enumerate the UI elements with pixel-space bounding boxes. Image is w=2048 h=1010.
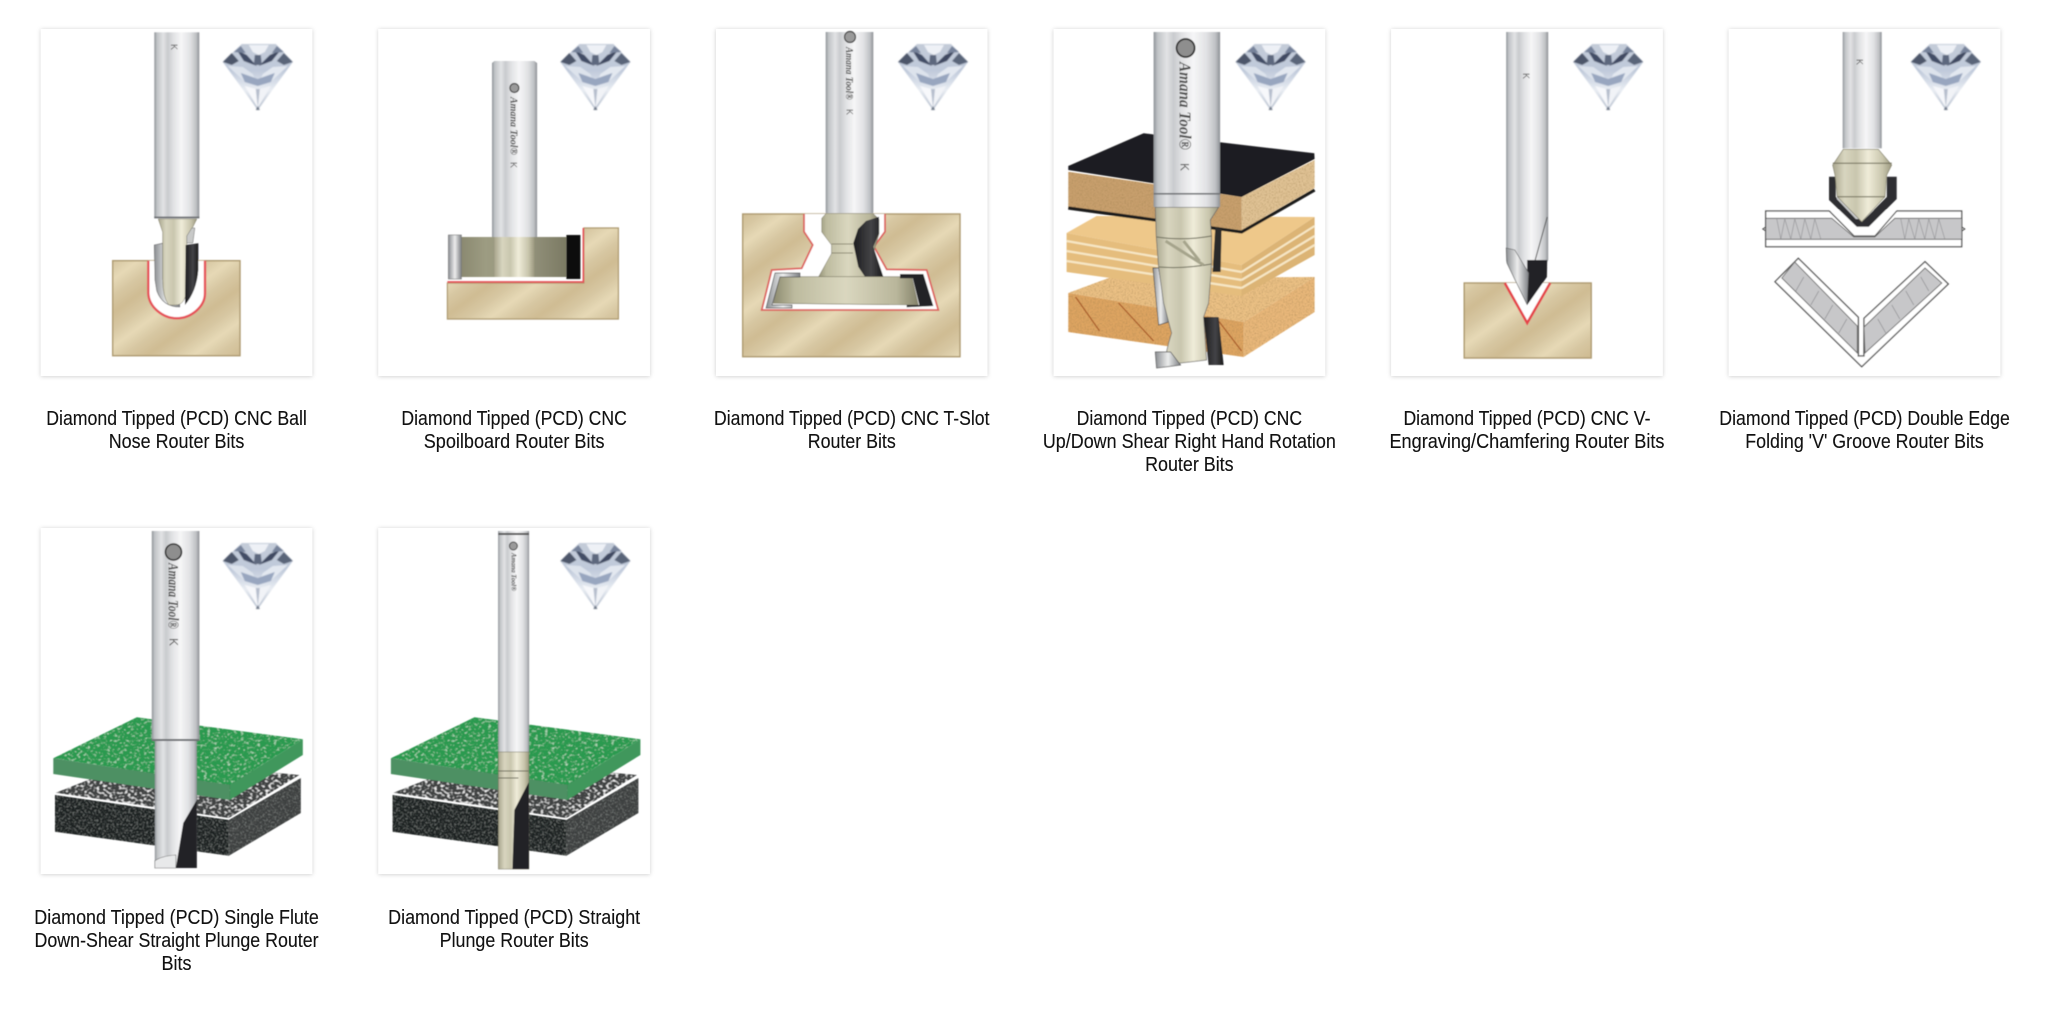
card: CNC Spoilboard Router Bits	[378, 29, 650, 453]
caption	[1389, 408, 1664, 453]
caption	[46, 408, 307, 453]
illustration: folding V-groove bit and composite panel: K	[1854, 59, 1864, 65]
illustration: ball nose bit cutting a groove in wood	[113, 32, 240, 356]
illustration: V-engraving bit in wood: K	[1521, 73, 1531, 79]
caption: Plunge Router Bits	[440, 930, 589, 952]
card background	[41, 29, 312, 376]
card: CNC V-Engraving/Chamfering Router Bits	[1389, 29, 1664, 453]
caption: Diamond Tipped (PCD) Straight	[388, 907, 641, 929]
card background	[1054, 29, 1325, 376]
caption	[401, 408, 627, 453]
caption: Diamond Tipped (PCD) Double Edge	[1719, 408, 2010, 430]
caption: Diamond Tipped (PCD) CNC T-Slot	[714, 408, 990, 430]
illustration: compression bit with layered boards: K	[1178, 163, 1192, 171]
card: CNC Ball Nose Router Bits	[41, 29, 312, 453]
caption: Diamond Tipped (PCD) CNC Ball	[46, 408, 307, 430]
illustration: single flute bit with green and black sheets: K	[166, 638, 180, 646]
card background	[1729, 29, 2000, 376]
caption	[1043, 408, 1336, 476]
caption	[388, 907, 641, 952]
green sheet	[53, 717, 303, 800]
illustration: compression bit with layered boards: Amana Tool®	[1176, 61, 1195, 150]
illustration: ball nose bit cutting a groove in wood: K	[169, 44, 179, 50]
caption: Folding 'V' Groove Router Bits	[1745, 431, 1984, 453]
card: CNC Up/Down Shear Right Hand Rotation Router Bits	[1043, 29, 1336, 476]
caption: Down-Shear Straight Plunge Router	[35, 930, 319, 952]
caption: Up/Down Shear Right Hand Rotation	[1043, 431, 1336, 453]
flat composite panel with V groove	[1763, 210, 1965, 247]
icon: diamond	[1911, 44, 1981, 110]
icon: diamond	[223, 543, 293, 609]
illustration: straight plunge bit with green and black sheets	[391, 531, 640, 869]
card background	[1391, 29, 1663, 376]
caption: Diamond Tipped (PCD) CNC V-	[1403, 408, 1650, 430]
card background	[716, 29, 988, 376]
caption	[714, 408, 990, 453]
illustration: T-slot bit in wood: Amana Tool®	[843, 46, 855, 100]
icon: diamond	[898, 44, 968, 110]
illustration: folding V-groove bit and composite panel	[1763, 32, 1965, 367]
caption: Diamond Tipped (PCD) CNC	[1077, 408, 1302, 430]
illustration: compression bit with layered boards	[1067, 32, 1315, 368]
caption: Nose Router Bits	[109, 431, 244, 453]
icon: diamond	[1236, 44, 1306, 110]
card: Single Flute Down-Shear Straight Plunge Router Bits	[34, 528, 319, 975]
illustration: single flute bit with green and black sheets	[53, 531, 303, 868]
black textured sheet	[393, 760, 638, 856]
icon: diamond	[1573, 44, 1643, 110]
illustration: spoilboard surfacing bit in wood	[447, 61, 618, 319]
card: Double Edge Folding 'V' Groove Router Bits	[1719, 29, 2010, 453]
top board: laminate on particle board	[1068, 133, 1315, 232]
middle board: plywood	[1067, 216, 1315, 296]
caption	[1719, 408, 2010, 453]
illustration: straight plunge bit with green and black sheets: Amana Tool®	[509, 552, 517, 592]
card background	[41, 528, 312, 874]
caption: Diamond Tipped (PCD) CNC	[401, 408, 627, 430]
icon: diamond	[223, 44, 293, 110]
illustration: V-engraving bit in wood	[1464, 32, 1591, 358]
bottom board: solid wood	[1068, 277, 1315, 357]
folded composite panel	[1775, 258, 1948, 367]
caption: Bits	[162, 953, 192, 975]
illustration: spoilboard surfacing bit in wood: Amana Tool®	[507, 96, 518, 156]
caption: Router Bits	[808, 431, 896, 453]
card: Straight Plunge Router Bits	[378, 528, 650, 952]
illustration: spoilboard surfacing bit in wood: K	[508, 162, 518, 168]
card: CNC T-Slot Router Bits	[714, 29, 990, 453]
caption	[34, 907, 319, 975]
green sheet	[391, 717, 640, 800]
icon: diamond	[560, 543, 630, 609]
illustration: single flute bit with green and black sheets: Amana Tool®	[164, 562, 180, 629]
card background	[378, 528, 650, 874]
caption: Router Bits	[1145, 454, 1234, 476]
caption: Diamond Tipped (PCD) Single Flute	[34, 907, 319, 929]
caption: Engraving/Chamfering Router Bits	[1389, 431, 1664, 453]
card background	[378, 29, 650, 376]
black textured sheet	[55, 760, 301, 856]
icon: diamond	[560, 44, 630, 110]
caption: Spoilboard Router Bits	[424, 431, 605, 453]
illustration: T-slot bit in wood: K	[844, 109, 854, 115]
illustration: T-slot bit in wood	[743, 32, 960, 357]
